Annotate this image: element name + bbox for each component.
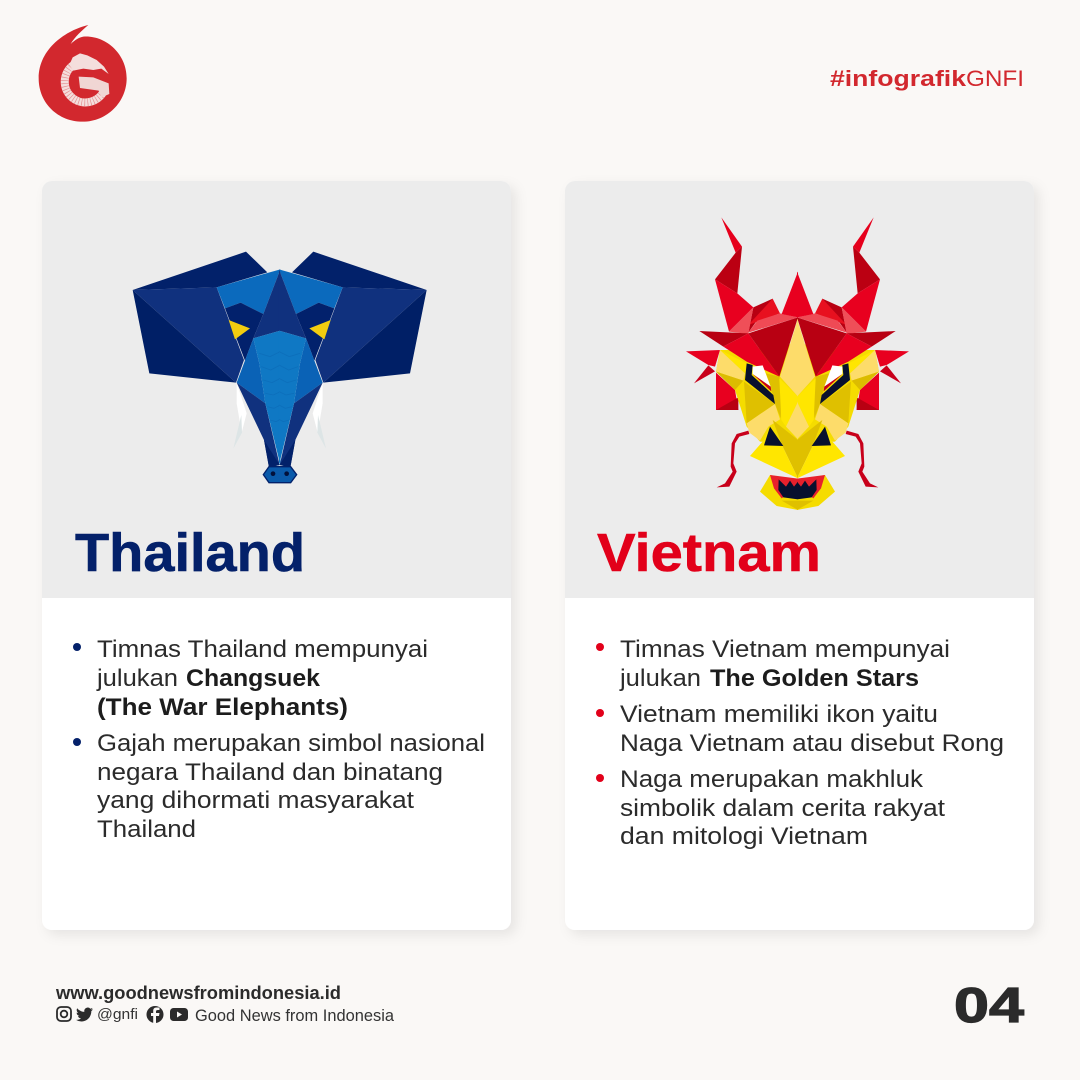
hashtag: GNFI — [966, 66, 1024, 91]
text block: Thailand facts: yang dihormati masyarakat — [97, 787, 414, 814]
text block: Thailand facts: Changsuek — [186, 665, 321, 692]
text block: Thailand facts: Thailand — [97, 816, 196, 843]
text block: Vietnam facts: Timnas Vietnam mempunyai — [620, 636, 950, 663]
text block: Vietnam facts — [596, 636, 1004, 850]
text block: Thailand facts: Gajah merupakan simbol nasional — [97, 730, 485, 757]
text block: Vietnam facts: dan mitologi Vietnam — [620, 823, 868, 850]
text block: Vietnam facts: Vietnam memiliki ikon yaitu — [620, 701, 938, 728]
heading: Thailand: Thailand — [75, 523, 305, 583]
hashtag — [830, 66, 1024, 91]
panel: Thailand — [42, 181, 511, 930]
text block: Thailand facts: (The War Elephants) — [97, 694, 348, 721]
text block: Vietnam facts: The Golden Stars — [710, 665, 919, 692]
hashtag: #infografik — [830, 66, 967, 91]
text block: Vietnam facts: Naga merupakan makhluk — [620, 766, 924, 793]
icon: facebook — [146, 1006, 164, 1023]
icon: twitter — [76, 1008, 93, 1021]
icon: dragon head — [686, 217, 909, 510]
icon: instagram — [57, 1007, 71, 1021]
icon: elephant head — [133, 252, 427, 483]
heading: Vietnam: Vietnam — [597, 523, 821, 583]
website url: www.goodnewsfromindonesia.id — [55, 983, 341, 1003]
social name: Good News from Indonesia — [195, 1006, 395, 1025]
text block: Vietnam facts: simbolik dalam cerita rakyat — [620, 795, 945, 822]
text block: Thailand facts: Timnas Thailand mempunyai — [97, 636, 428, 663]
text block: Thailand facts: julukan — [96, 665, 178, 692]
text block: Thailand facts — [73, 636, 485, 843]
elephant nose — [263, 467, 297, 483]
icon: youtube — [170, 1008, 188, 1021]
handle: @gnfi — [97, 1006, 138, 1023]
text block: Vietnam facts: Naga Vietnam atau disebut Rong — [620, 730, 1004, 757]
footer: website and social — [55, 983, 395, 1025]
page number: 04 — [954, 979, 1024, 1033]
text block: Thailand facts: negara Thailand dan binatang — [97, 759, 443, 786]
text block: Vietnam facts: julukan — [619, 665, 701, 692]
logo — [39, 25, 127, 122]
panel: Vietnam — [565, 181, 1034, 930]
